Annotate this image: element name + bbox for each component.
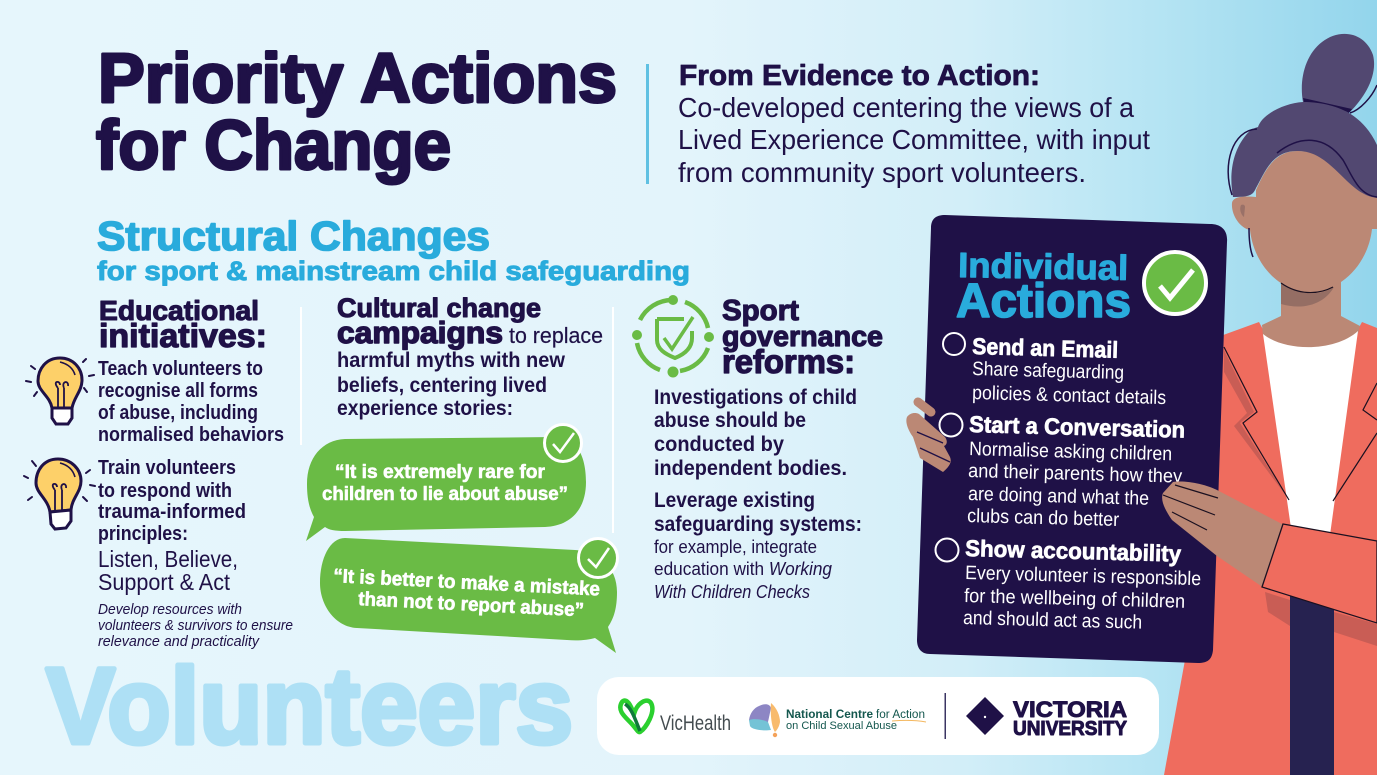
heading: structural changes: for sport & mainstream child safeguarding: [97, 256, 690, 286]
individual actions content: Share safeguarding: [972, 358, 1124, 384]
individual actions content: Normalise asking children: [969, 438, 1172, 465]
column: sport governance reforms: [654, 295, 883, 602]
title: [96, 39, 617, 184]
column: sport governance reforms: Sport: [722, 295, 799, 327]
illustration: presenter: [1164, 34, 1377, 775]
column: educational initiatives: volunteers & survivors to ensure: [98, 618, 293, 634]
heading: structural changes: [97, 213, 690, 286]
speech bubble 1: children to lie about abuse”: [322, 483, 568, 505]
lapel shadows: [1224, 350, 1377, 646]
intro text: from community sport volunteers.: [678, 157, 1086, 188]
individual actions content: Send an Email: [972, 333, 1118, 363]
column: sport governance reforms: independent bodies.: [654, 457, 847, 480]
chin line: [1281, 283, 1333, 293]
column: cultural change campaigns: [337, 293, 603, 420]
column: sport governance reforms: governance: [722, 321, 883, 353]
right hand and sleeve: [1162, 481, 1377, 623]
title: Priority Actions: [98, 39, 617, 117]
panel: individual actions board: [917, 215, 1227, 663]
hair bun: [1302, 34, 1374, 112]
individual actions content: Every volunteer is responsible: [965, 562, 1201, 590]
speech bubble 1: [306, 424, 586, 541]
logo: Victoria University: [966, 697, 1128, 740]
column: educational initiatives: Teach volunteers to: [98, 358, 263, 380]
column: cultural change campaigns: beliefs, centering lived: [337, 374, 547, 397]
speech bubble 2: [320, 538, 618, 653]
column: cultural change campaigns: campaigns: [337, 315, 503, 350]
tie stripe: [1290, 590, 1334, 775]
title: for Change: [96, 106, 451, 184]
hair lines: [1228, 85, 1377, 257]
logo: National Centre for Action on Child Sexual Abuse: for Action: [876, 709, 925, 721]
column: cultural change campaigns: Cultural change: [337, 293, 541, 323]
individual actions content: policies & contact details: [972, 382, 1167, 409]
individual actions content: Individual: [958, 246, 1129, 288]
icon: governance shield: [632, 295, 714, 378]
heading: volunteers: Volunteers: [46, 645, 573, 766]
column: educational initiatives: Educational: [99, 295, 259, 326]
column: sport governance reforms: education with Working: [654, 559, 832, 579]
intro text: From Evidence to Action:: [679, 60, 1040, 92]
speech bubble 2: than not to report abuse”: [358, 588, 585, 621]
column: educational initiatives: trauma-informed: [98, 501, 246, 523]
logo: National Centre for Action on Child Sexual Abuse: National Centre: [786, 709, 873, 721]
individual actions content: and should act as such: [963, 607, 1142, 634]
logo: VicHealth: VicHealth: [660, 712, 731, 735]
speech bubble 1: “It is extremely rare for: [335, 461, 545, 483]
logo: National Centre for Action on Child Sexual Abuse: [749, 703, 926, 737]
logo: National Centre for Action on Child Sexual Abuse: on Child Sexual Abuse: [786, 720, 897, 732]
column: sport governance reforms: for example, integrate: [654, 537, 817, 557]
shirt: [1263, 331, 1358, 535]
column: sport governance reforms: safeguarding systems:: [654, 513, 862, 536]
logo: VicHealth: [620, 701, 731, 735]
column: educational initiatives: initiatives:: [99, 317, 267, 354]
column: sport governance reforms: reforms:: [722, 343, 855, 380]
individual actions content: are doing and what the: [968, 483, 1149, 510]
column: educational initiatives: normalised behaviors: [98, 424, 284, 446]
individual actions content: for the wellbeing of children: [964, 585, 1185, 613]
column: educational initiatives: Listen, Believe,: [98, 546, 238, 572]
intro text: Lived Experience Committee, with input: [678, 124, 1150, 155]
ear shadow: [1240, 205, 1245, 217]
column: educational initiatives: of abuse, including: [98, 402, 258, 424]
column: cultural change campaigns: to replace: [509, 323, 603, 348]
heading: structural changes: Structural Changes: [97, 213, 490, 259]
individual actions content: [936, 246, 1206, 634]
intro text: Co-developed centering the views of a: [678, 92, 1134, 123]
column: educational initiatives: recognise all forms: [98, 380, 258, 402]
icon: light bulb 1: [26, 358, 94, 424]
logo: Victoria University: UNIVERSITY: [1013, 718, 1128, 740]
column: cultural change campaigns: experience stories:: [337, 397, 513, 420]
individual actions content: Show accountability: [965, 535, 1182, 567]
column: educational initiatives: Develop resources with: [98, 602, 242, 618]
column: sport governance reforms: Leverage existing: [654, 489, 815, 512]
neck: [1262, 280, 1360, 348]
jacket: [1164, 322, 1377, 775]
individual actions content: clubs can do better: [967, 505, 1120, 531]
column: educational initiatives: Train volunteers: [98, 457, 236, 479]
column: sport governance reforms: Investigations of child: [654, 386, 857, 409]
column: cultural change campaigns: harmful myths with new: [337, 349, 566, 372]
column: educational initiatives: [98, 295, 293, 650]
column: sport governance reforms: conducted by: [654, 433, 784, 456]
icon: light bulb 2: [24, 459, 95, 529]
lapel lines: [1224, 347, 1377, 501]
column: educational initiatives: to respond with: [98, 480, 232, 502]
column: educational initiatives: relevance and practicality: [98, 634, 260, 650]
logo panel: [597, 677, 1159, 755]
hair: [1231, 102, 1377, 198]
speech bubble 2: “It is better to make a mistake: [333, 565, 601, 601]
individual actions content: Start a Conversation: [969, 411, 1185, 443]
left hand: [906, 402, 951, 472]
logo: Victoria University: VICTORIA: [1013, 697, 1127, 722]
neck shadow: [1281, 283, 1334, 307]
column: sport governance reforms: With Children Checks: [654, 582, 810, 602]
individual actions content: and their parents how they: [968, 460, 1183, 488]
column: educational initiatives: principles:: [98, 523, 188, 545]
individual actions content: Actions: [956, 275, 1131, 328]
column: sport governance reforms: abuse should be: [654, 409, 806, 432]
column: educational initiatives: Support & Act: [98, 569, 231, 595]
face: [1232, 151, 1377, 292]
intro text: [678, 60, 1150, 188]
